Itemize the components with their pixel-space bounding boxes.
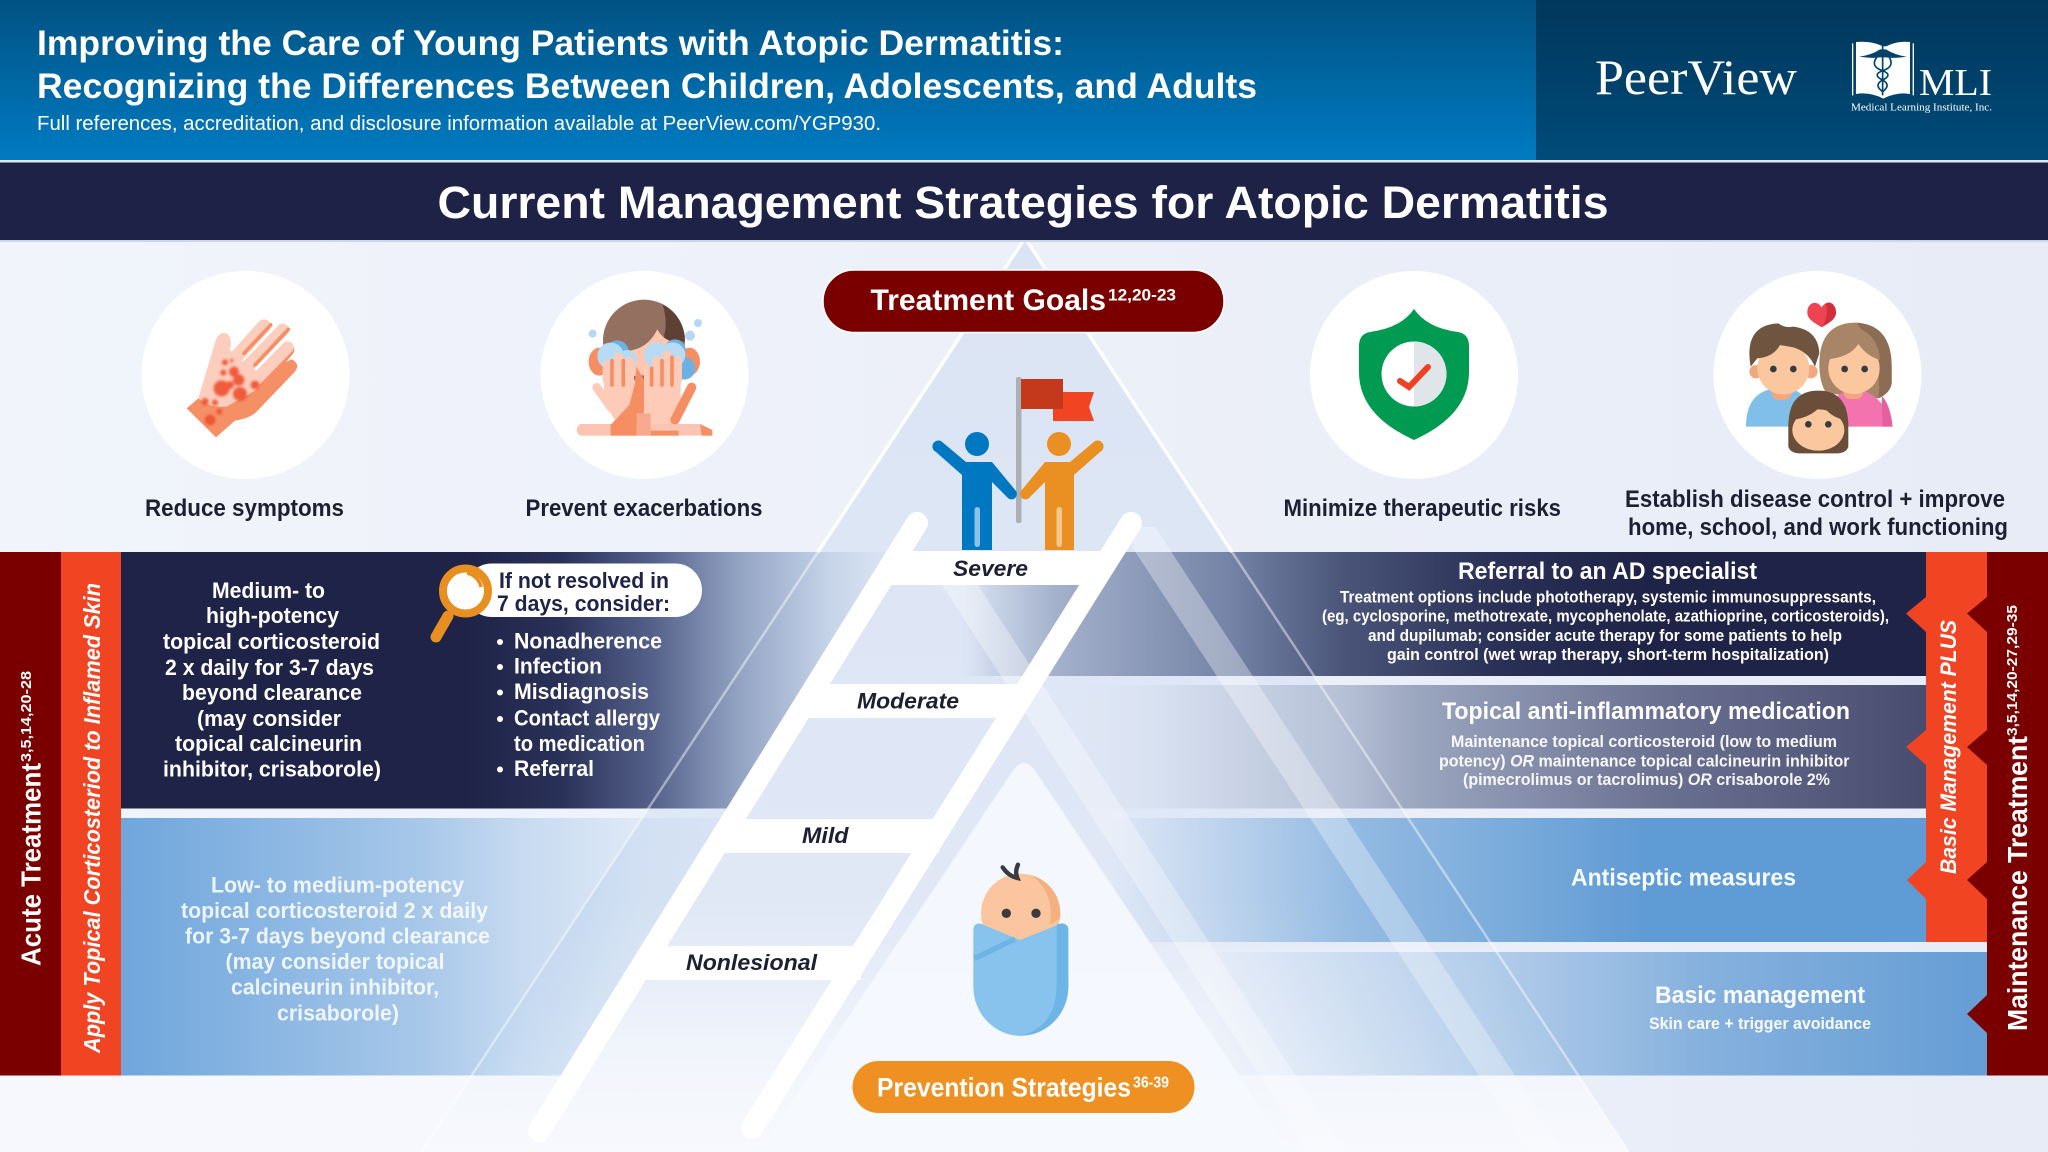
- callout: if not resolved: If not resolved in: [499, 568, 669, 593]
- goal: establish disease control: [1625, 271, 2008, 541]
- text: topical anti-inflammatory medication: potency) OR maintenance topical calcineurin inhibitor: [1439, 752, 1850, 770]
- text: low to medium potency: Low- to medium-potency: [211, 872, 464, 898]
- section title bar: Current Management Strategies for Atopic Dermatitis: [438, 177, 1608, 228]
- text: medium to high potency: Medium- to: [212, 578, 325, 603]
- text: topical anti-inflammatory medication: Topical anti-inflammatory medication: [1442, 698, 1850, 725]
- icon: shield: [1359, 309, 1469, 440]
- goal: minimize therapeutic risks: [1284, 271, 1561, 522]
- main title: Recognizing the Differences Between Children, Adolescents, and Adults: [37, 67, 1257, 106]
- rung: mild: Mild: [802, 823, 850, 848]
- callout: if not resolved: 7 days, consider:: [497, 591, 670, 616]
- text: low to medium potency: [181, 872, 490, 1026]
- treatment goals pill: Treatment Goals: [870, 284, 1106, 317]
- list: considerations: to medication: [514, 731, 645, 756]
- right column: maintenance treatment: 3,5,14,20-27,29-35: [2004, 605, 2021, 736]
- prevention strategies pill: Prevention Strategies: [877, 1072, 1131, 1102]
- page background: [0, 240, 2048, 1152]
- translucent pyramid strips: [421, 238, 1629, 1152]
- list: considerations: Nonadherence: [514, 628, 662, 654]
- text: medium to high potency: (may consider: [197, 706, 341, 731]
- label: home, school, and work functioning: [1628, 514, 2008, 541]
- text: medium to high potency: topical corticosteroid: [163, 629, 380, 654]
- right column: maintenance treatment: [1967, 552, 2048, 1076]
- label: Minimize therapeutic risks: [1284, 495, 1561, 522]
- text: low to medium potency: topical corticosteroid 2 x daily: [181, 898, 488, 923]
- left column: apply topical corticosteroid: Apply Topical Corticosteriod to Inflamed Skin: [79, 583, 105, 1054]
- right column: basic management plus: [1906, 552, 1990, 942]
- icon: magnifier: [436, 568, 488, 637]
- text: low to medium potency: for 3-7 days beyond clearance: [185, 924, 490, 949]
- text: referral to an AD specialist: gain control (wet wrap therapy, short-term hospitalization): [1387, 646, 1829, 664]
- text: low to medium potency: crisaborole): [277, 1001, 399, 1026]
- rung: moderate: [808, 684, 1022, 718]
- label: [1625, 486, 2008, 541]
- logo: Medical Learning Institute: MLI: [1919, 62, 1992, 104]
- list: considerations: Referral: [514, 756, 594, 781]
- icon: family: [1746, 303, 1893, 453]
- text: topical anti-inflammatory medication: (pimecrolimus or tacrolimus) OR crisaborole 2%: [1463, 771, 1830, 789]
- text: antiseptic measures: Antiseptic measures: [1571, 864, 1796, 892]
- treatment goals pill: [823, 270, 1224, 332]
- left column: apply topical corticosteroid: [61, 552, 121, 1076]
- header banner: [0, 0, 2048, 162]
- text: medium to high potency: inhibitor, crisaborole): [163, 756, 381, 782]
- rung: nonlesional: Nonlesional: [686, 950, 818, 975]
- text: referral to an AD specialist: Treatment options include phototherapy, systemic immunosuppressants,: [1340, 588, 1876, 606]
- icon: people with flag: [932, 377, 1104, 550]
- callout: if not resolved: [436, 564, 702, 637]
- rung: mild: [725, 819, 939, 853]
- text: basic management: Basic management: [1655, 982, 1865, 1009]
- icon: face washing: [577, 300, 712, 436]
- goal: prevent exacerbations: [526, 271, 762, 522]
- rung: moderate: Moderate: [857, 688, 959, 714]
- text: low to medium potency: (may consider topical: [226, 949, 444, 974]
- list: considerations: [497, 628, 662, 781]
- label: Reduce symptoms: [145, 495, 344, 522]
- left column: acute treatment: 3,5,14,20-28: [18, 671, 35, 762]
- severity ladder: [539, 523, 1131, 1131]
- treatment goals pill: 12,20-23: [1108, 286, 1176, 304]
- icon: hand with rash: [187, 325, 297, 437]
- text: referral to an AD specialist: Referral to an AD specialist: [1458, 558, 1757, 585]
- text: referral to an AD specialist: (eg, cyclosporine, methotrexate, mycophenolate, azathioprine, corticosteroids),: [1322, 608, 1889, 626]
- text: medium to high potency: [163, 578, 381, 782]
- text: medium to high potency: 2 x daily for 3-7 days: [165, 655, 374, 680]
- strategy bands: [121, 552, 1988, 1076]
- text: referral to an AD specialist: [1322, 558, 1889, 664]
- main title: [37, 24, 1257, 106]
- text: referral to an AD specialist: and dupilumab; consider acute therapy for some patients to help: [1368, 627, 1842, 645]
- reference note: Full references, accreditation, and disclosure information available at PeerView.com/YGP930.: [37, 112, 881, 135]
- main title: Improving the Care of Young Patients with Atopic Dermatitis:: [37, 24, 1064, 63]
- label: Prevent exacerbations: [526, 495, 762, 522]
- logo: Medical Learning Institute: [1851, 42, 1992, 113]
- text: topical anti-inflammatory medication: Maintenance topical corticosteroid (low to medium: [1451, 733, 1837, 751]
- right column: maintenance treatment: Maintenance Treatment: [2002, 736, 2033, 1031]
- left column: acute treatment: Acute Treatment: [16, 763, 46, 966]
- prevention strategies pill: [852, 1061, 1194, 1113]
- rung: severe: Severe: [953, 556, 1028, 581]
- big pyramid: [421, 238, 1629, 1152]
- text: medium to high potency: topical calcineurin: [175, 731, 362, 756]
- inner prevention triangle: [758, 763, 1290, 1152]
- ladder rails: [539, 523, 1131, 1131]
- logo: PeerView: PeerView: [1595, 49, 1797, 105]
- text: topical anti-inflammatory medication: [1439, 698, 1850, 789]
- text: low to medium potency: calcineurin inhibitor,: [231, 974, 439, 1000]
- list: considerations: Contact allergy: [514, 706, 660, 730]
- icon: swaddled baby: [973, 865, 1068, 1036]
- goal: reduce symptoms: [142, 271, 350, 522]
- label: Establish disease control + improve: [1625, 486, 2005, 513]
- list: considerations: Misdiagnosis: [514, 679, 649, 704]
- text: basic management: [1649, 982, 1871, 1033]
- left column: acute treatment: [0, 552, 61, 1076]
- text: basic management: Skin care + trigger avoidance: [1649, 1015, 1871, 1033]
- rung: nonlesional: [647, 946, 861, 980]
- text: medium to high potency: high-potency: [206, 603, 339, 628]
- section title bar: [0, 162, 2048, 242]
- right column: basic management plus: Basic Management PLUS: [1936, 620, 1961, 874]
- prevention strategies pill: 36-39: [1133, 1074, 1169, 1092]
- rung: severe: [889, 551, 1103, 585]
- text: medium to high potency: beyond clearance: [182, 680, 362, 705]
- logo: Medical Learning Institute: Medical Learning Institute, Inc.: [1851, 102, 1992, 114]
- list: considerations: Infection: [514, 654, 602, 678]
